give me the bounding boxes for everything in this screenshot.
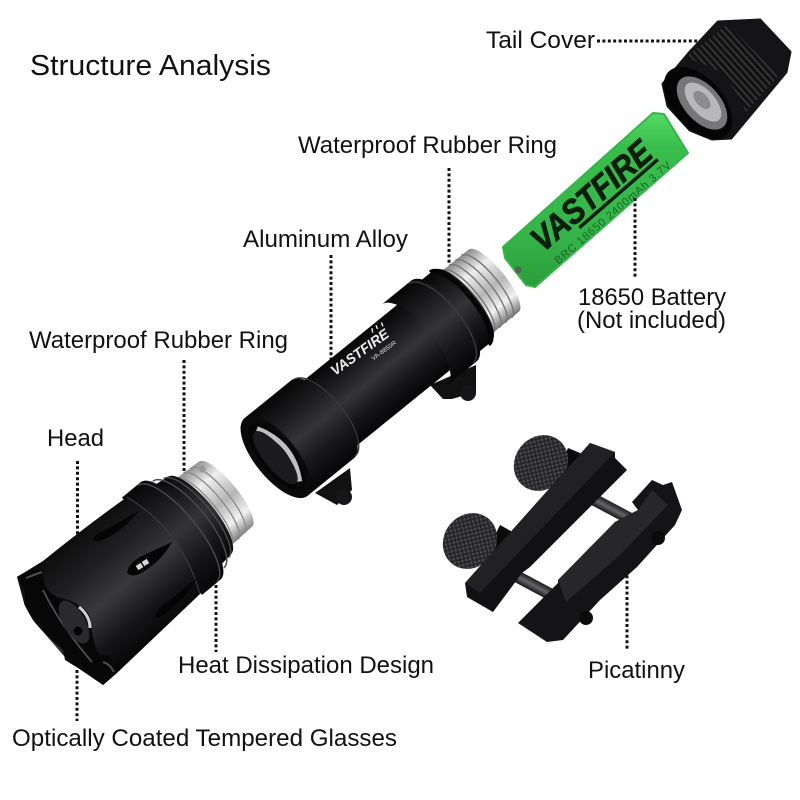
illustration: tail cover: [651, 20, 790, 152]
left rail: [465, 443, 627, 612]
label: aluminum alloy: Aluminum Alloy: [243, 226, 408, 253]
battery brand text: BRC 18650 2400mAh 3.7V: [553, 159, 674, 267]
label: 18650 battery: (Not included): [577, 307, 726, 334]
head thread: [163, 453, 263, 556]
label: 18650 battery: 18650 Battery: [578, 284, 726, 311]
head shell: [17, 497, 200, 685]
mount clamp: [315, 365, 476, 505]
label: heat dissipation design: Heat Dissipation Design: [178, 652, 434, 679]
body logo: VASTFIRE: [327, 325, 392, 378]
rods: [504, 488, 633, 604]
bulge section: [382, 268, 492, 385]
head rings: [142, 464, 246, 577]
illustration: battery: [503, 113, 688, 287]
label: waterproof rubber ring, upper: Waterproof Rubber Ring: [298, 132, 557, 159]
label: optically coated tempered glasses: Optically Coated Tempered Glasses: [12, 725, 397, 752]
head bezel: [17, 570, 117, 685]
tube: [292, 292, 466, 455]
right rail: [518, 480, 682, 642]
illustration: picatinny mount: [432, 424, 682, 642]
front ring: [245, 368, 370, 496]
lens: [228, 405, 324, 509]
rear section: [410, 260, 504, 361]
threaded silver end: [433, 242, 528, 340]
battery brand text: VASTFIRE: [523, 132, 661, 259]
label: picatinny: Picatinny: [588, 657, 685, 684]
head vents: [93, 511, 139, 541]
label: picatinny: [588, 570, 685, 684]
title: Structure Analysis: [30, 50, 271, 82]
knobs: [432, 424, 592, 580]
label: tail cover: Tail Cover: [486, 27, 595, 54]
label: 18650 battery: [577, 198, 726, 334]
illustration: body tube: [227, 233, 536, 511]
illustration: flashlight head: [17, 438, 275, 685]
label: waterproof rubber ring, left: Waterproof Rubber Ring: [29, 327, 288, 354]
body logo: VA-8850R: [371, 340, 398, 362]
label: head: Head: [47, 425, 104, 452]
label: head: [47, 425, 104, 543]
